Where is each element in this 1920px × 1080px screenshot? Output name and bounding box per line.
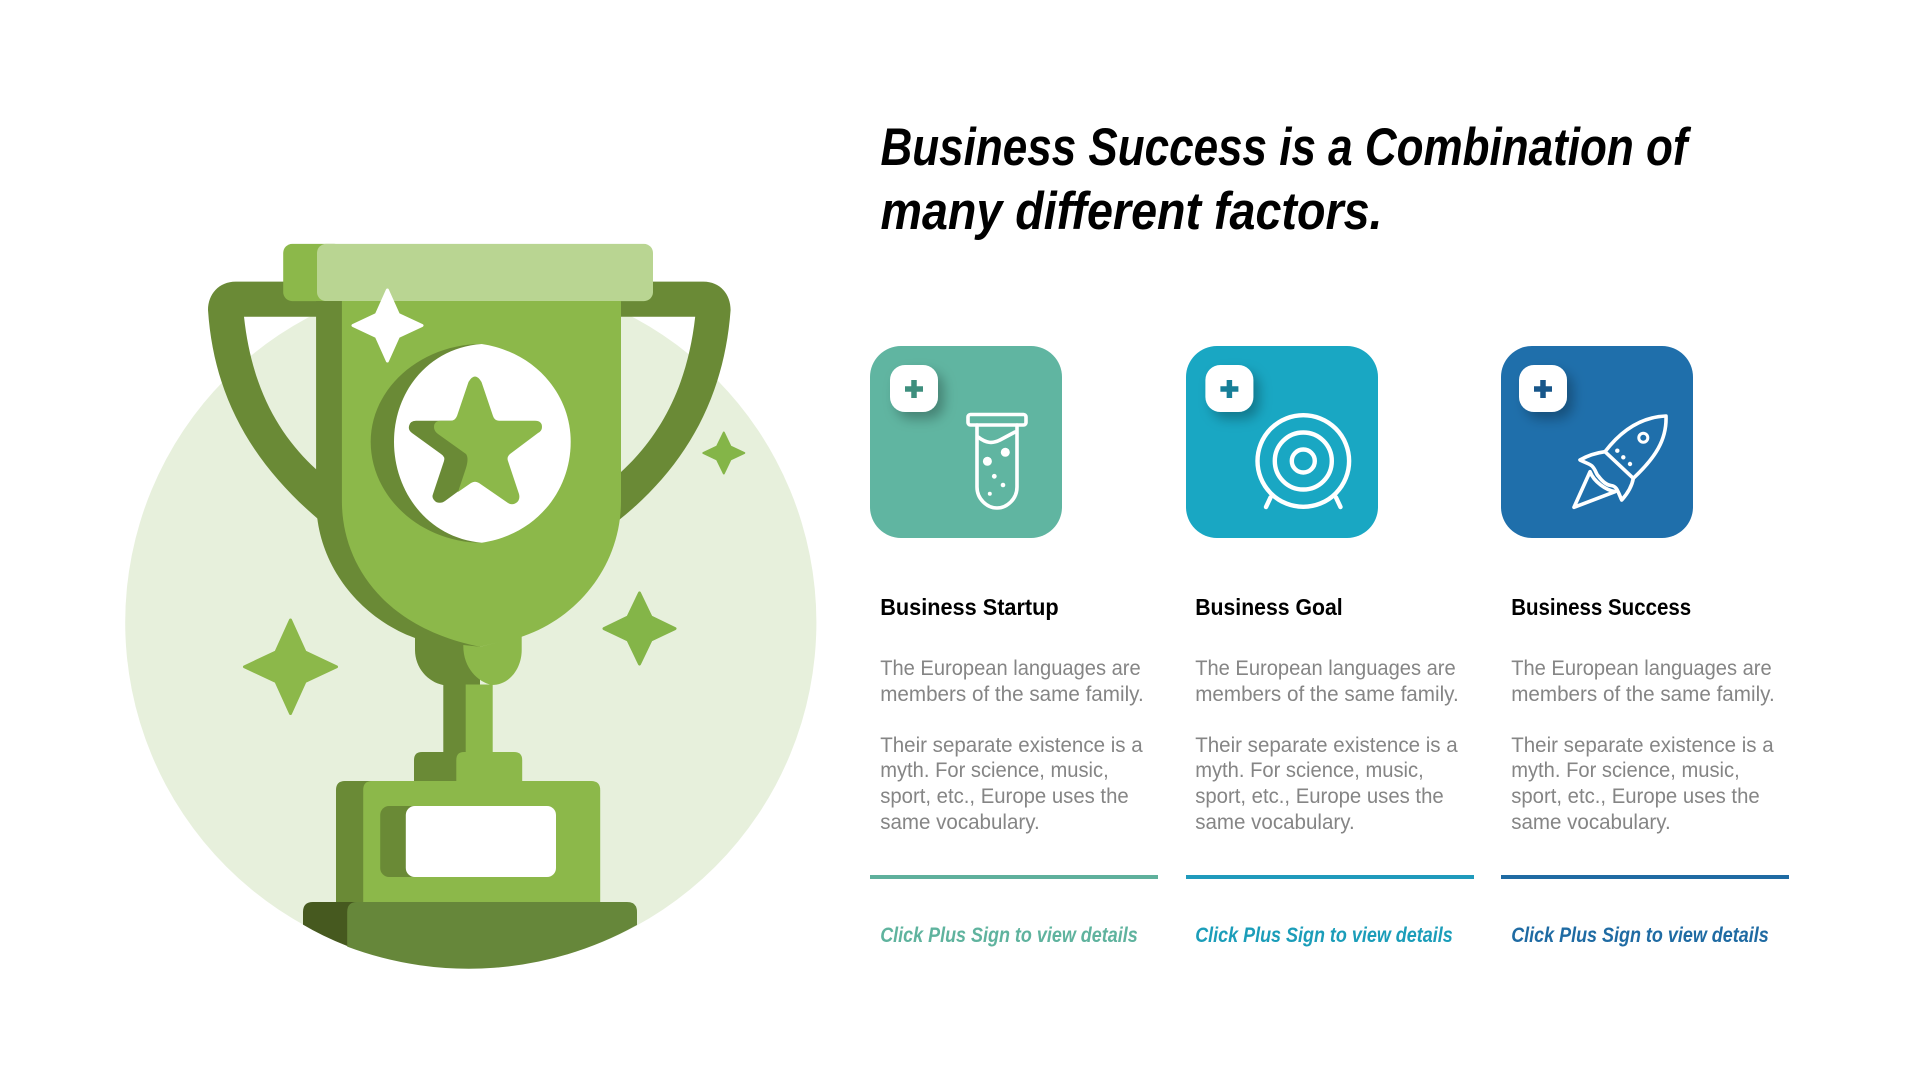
body text: The European languages are xyxy=(1195,657,1456,680)
panel: business success xyxy=(1501,346,1789,947)
body text: Their separate existence is a xyxy=(1511,734,1774,757)
background circle xyxy=(125,277,816,968)
icon: target xyxy=(1258,415,1349,507)
icon: rocket xyxy=(1574,416,1666,507)
coin shade xyxy=(371,344,482,543)
tile: business success xyxy=(1501,346,1693,538)
body text: The European languages are xyxy=(880,657,1141,680)
coin xyxy=(394,344,571,543)
stem collar xyxy=(414,752,522,782)
body text: members of the same family. xyxy=(880,683,1144,706)
heading: Business Startup xyxy=(880,594,1059,620)
title xyxy=(880,118,1692,241)
heading: Business Success xyxy=(1511,594,1691,620)
plus button xyxy=(1205,365,1253,412)
sparkle white xyxy=(353,290,422,361)
plus button xyxy=(890,365,938,412)
panel: business goal xyxy=(1186,346,1474,947)
sparkle right xyxy=(604,593,675,664)
heading: Business Goal xyxy=(1195,594,1343,620)
title: Business Success is a Combination of xyxy=(880,118,1692,177)
cup rear shade xyxy=(316,301,500,647)
coin star shade xyxy=(409,421,470,503)
trophy foot xyxy=(303,902,637,969)
body text xyxy=(880,657,1144,834)
tile: business startup xyxy=(870,346,1062,538)
trophy handles xyxy=(208,282,731,520)
icon: test tube xyxy=(968,414,1026,508)
body text: sport, etc., Europe uses the xyxy=(1195,785,1444,808)
trophy lid xyxy=(283,244,653,301)
link text: Click Plus Sign to view details xyxy=(880,924,1138,947)
panel: business startup xyxy=(870,346,1158,947)
body text: The European languages are xyxy=(1511,657,1772,680)
cup stem xyxy=(443,684,493,754)
body text: sport, etc., Europe uses the xyxy=(1511,785,1760,808)
icon: trophy xyxy=(208,244,744,969)
body text: same vocabulary. xyxy=(1195,811,1355,834)
body text: myth. For science, music, xyxy=(1195,759,1424,782)
body text: Their separate existence is a xyxy=(1195,734,1458,757)
body text: same vocabulary. xyxy=(880,811,1040,834)
body text: members of the same family. xyxy=(1511,683,1775,706)
trophy base xyxy=(336,781,600,903)
body text: same vocabulary. xyxy=(1511,811,1671,834)
cup front xyxy=(342,301,621,647)
sparkle small xyxy=(703,432,744,474)
body text xyxy=(1511,657,1775,834)
body text: members of the same family. xyxy=(1195,683,1459,706)
title: many different factors. xyxy=(880,182,1382,241)
body text: myth. For science, music, xyxy=(880,759,1109,782)
tile: business goal xyxy=(1186,346,1378,538)
body text: sport, etc., Europe uses the xyxy=(880,785,1129,808)
body text: myth. For science, music, xyxy=(1511,759,1740,782)
body text: Their separate existence is a xyxy=(880,734,1143,757)
cup neck shade xyxy=(415,636,480,685)
cup neck front xyxy=(463,636,522,685)
body text xyxy=(1195,657,1459,834)
plus button xyxy=(1519,365,1567,412)
sparkle large left xyxy=(244,620,336,714)
link text: Click Plus Sign to view details xyxy=(1195,924,1453,947)
name plate xyxy=(380,806,556,877)
link text: Click Plus Sign to view details xyxy=(1511,924,1769,947)
coin star xyxy=(434,376,542,504)
